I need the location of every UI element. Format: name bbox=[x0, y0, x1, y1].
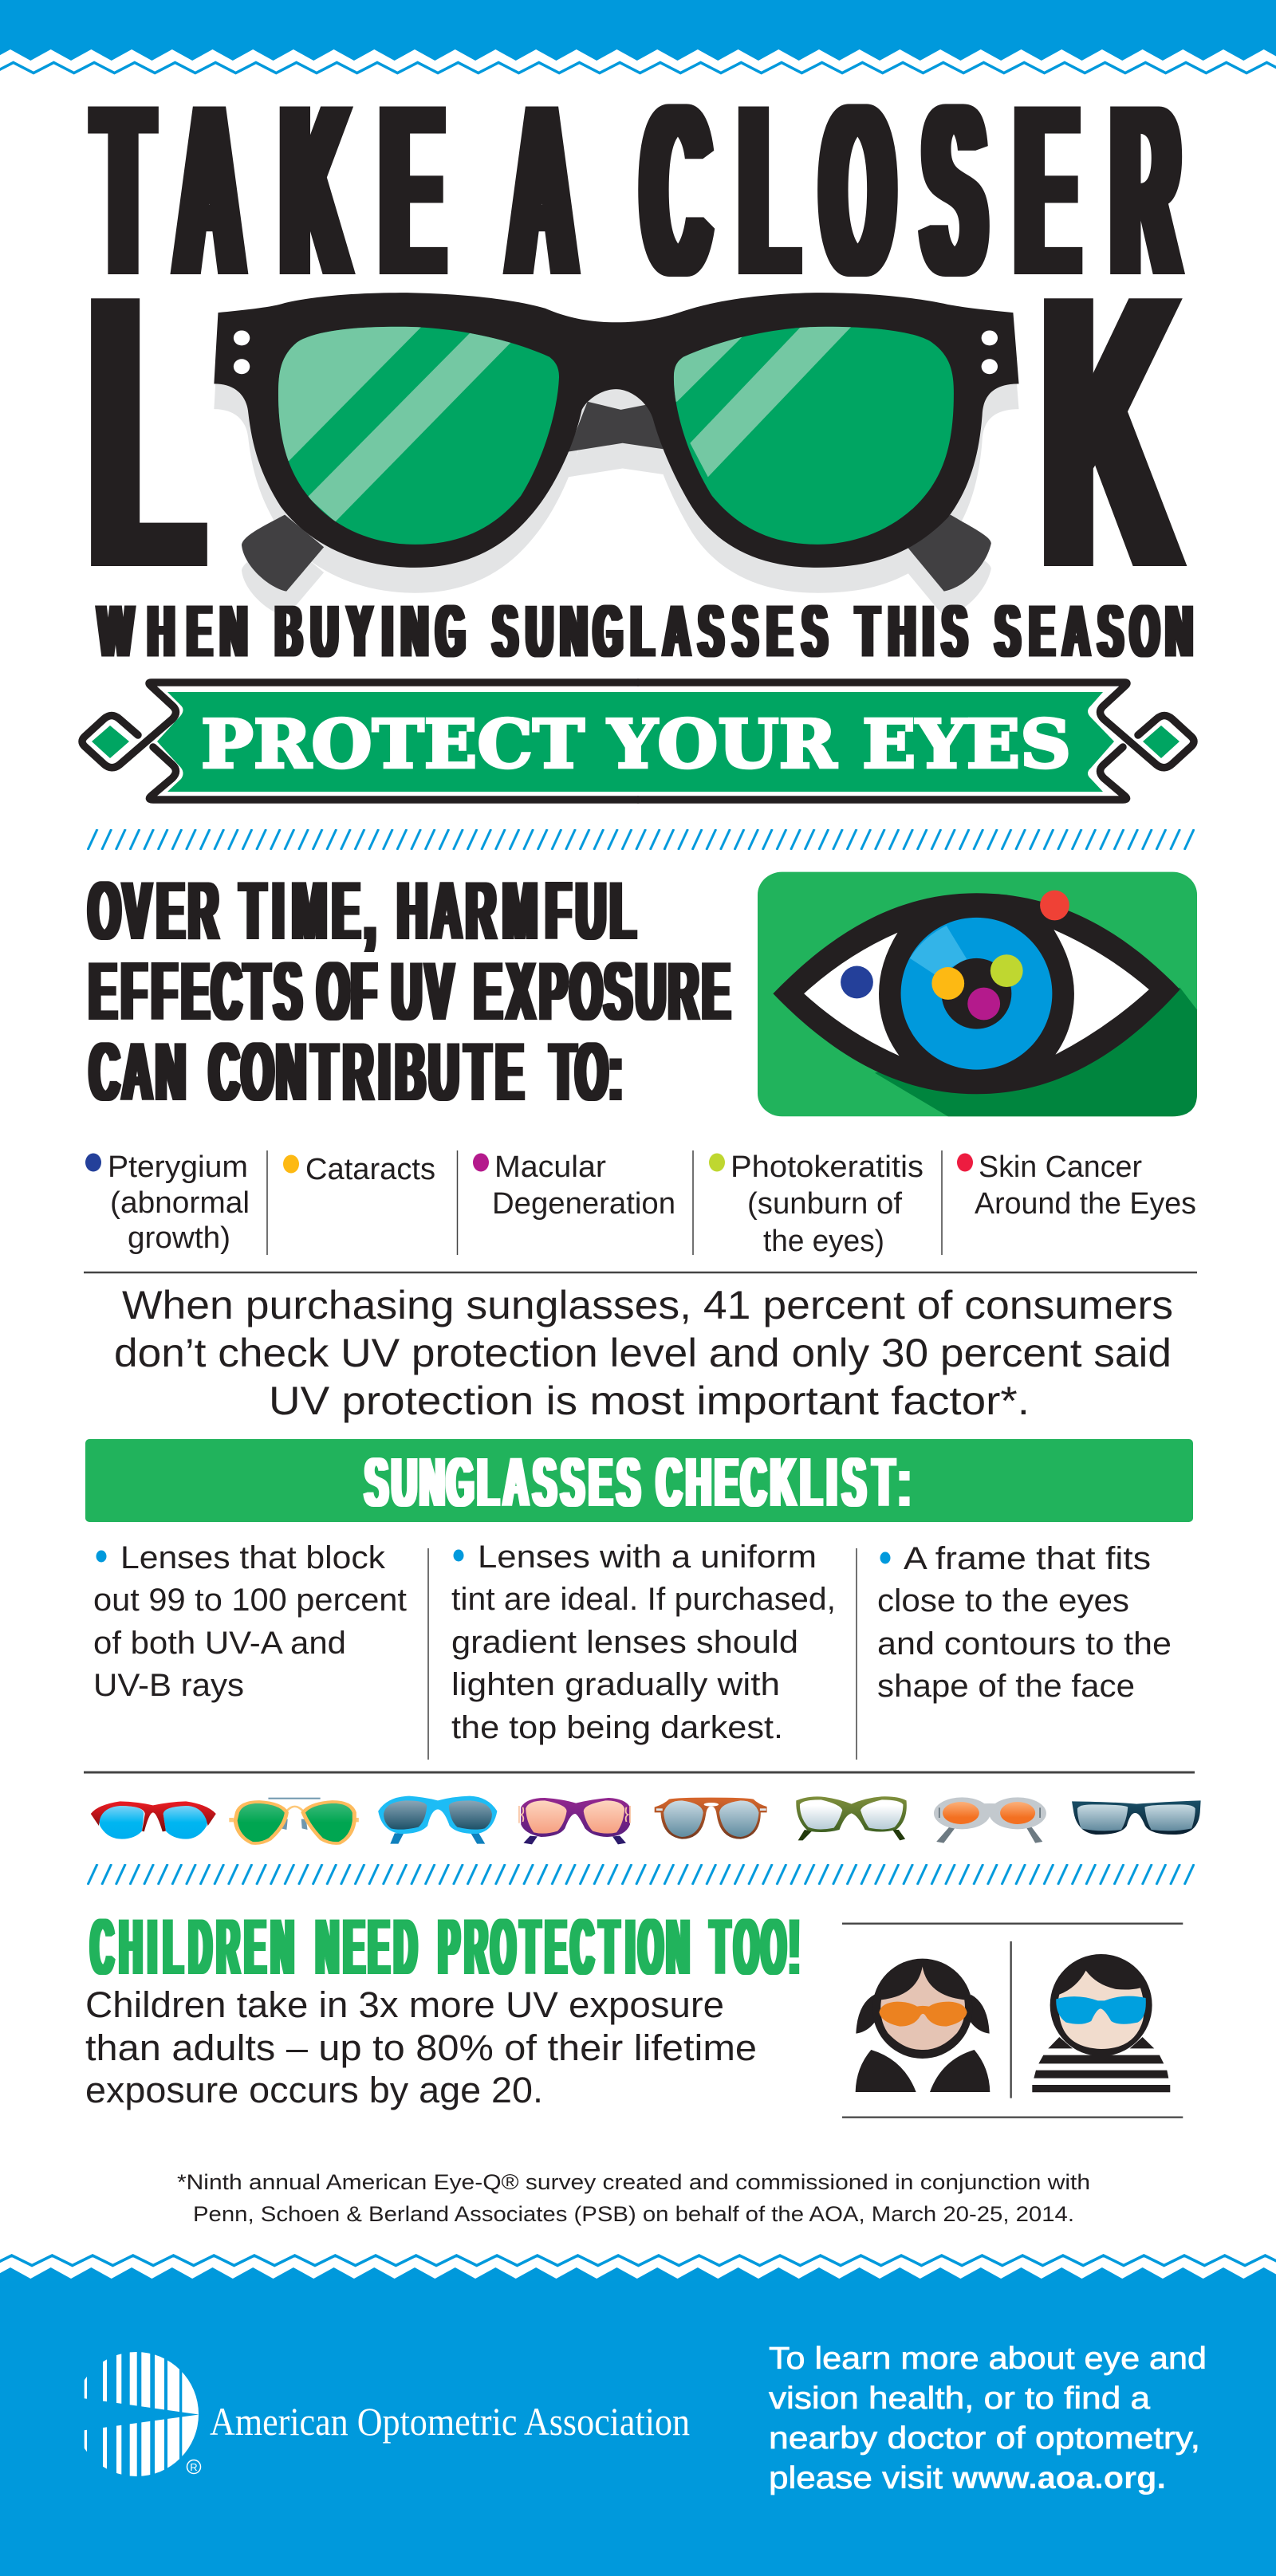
heading bar: sunglasses checklist: SUNGLASSES CHECKLIST: bbox=[364, 1444, 910, 1521]
item: cataracts: Cataracts bbox=[305, 1153, 435, 1186]
icon: silver round glasses bbox=[934, 1797, 1046, 1843]
text block: learn more: To learn more about eye and bbox=[769, 2342, 1207, 2376]
icon: blue frame glasses bbox=[378, 1796, 497, 1844]
text block: purchasing statistic: When purchasing sunglasses, 41 percent of consumers bbox=[122, 1283, 1173, 1327]
checklist item: lenses block UV: out 99 to 100 percent bbox=[93, 1583, 407, 1618]
text block: purchasing statistic bbox=[114, 1283, 1173, 1423]
text block: learn more: nearby doctor of optometry, bbox=[769, 2421, 1200, 2456]
heading: over time harmful effects: OVER TIME, HARMFUL bbox=[89, 866, 636, 958]
icon: striped eye circle bbox=[80, 2352, 199, 2476]
text block: learn more: vision health, or to find a bbox=[769, 2381, 1150, 2416]
item: skin cancer around the eyes: Skin Cancer bbox=[979, 1150, 1142, 1184]
logo: American Optometric Association bbox=[80, 2352, 690, 2476]
checklist item: uniform tint: Lenses with a uniform bbox=[478, 1540, 817, 1575]
text block: children exposure: exposure occurs by age 20. bbox=[85, 2070, 543, 2110]
item: macular degeneration: Degeneration bbox=[492, 1187, 675, 1221]
checklist item: lenses block UV: Lenses that block bbox=[120, 1540, 386, 1575]
heading bar: sunglasses checklist bbox=[85, 1439, 1193, 1522]
item: pterygium: (abnormal bbox=[110, 1186, 250, 1220]
item: pterygium: growth) bbox=[128, 1221, 230, 1255]
item: skin cancer around the eyes bbox=[957, 1150, 1196, 1221]
text block: children exposure bbox=[85, 1984, 757, 2110]
text block: children exposure: Children take in 3x more UV exposure bbox=[85, 1984, 724, 2025]
icon: boy with striped shirt and blue sunglasses bbox=[1032, 1954, 1170, 2092]
subtitle: WHEN BUYING SUNGLASSES THIS SEASON bbox=[98, 589, 1192, 673]
text block: purchasing statistic: don’t check UV protection level and only 30 percent said bbox=[114, 1331, 1172, 1375]
icon: green aviators bbox=[229, 1798, 359, 1843]
icon: registered mark bbox=[187, 2460, 201, 2473]
footnote: *Ninth annual American Eye-Q® survey created and commissioned in conjunction with bbox=[177, 2170, 1090, 2194]
item: skin cancer around the eyes: Around the Eyes bbox=[975, 1187, 1196, 1221]
checklist item: lenses block UV bbox=[93, 1540, 407, 1703]
text block: learn more bbox=[769, 2342, 1207, 2495]
checklist item: lenses block UV: UV-B rays bbox=[93, 1668, 244, 1703]
item: macular degeneration bbox=[473, 1150, 675, 1221]
icons: row of sunglasses styles, part two bbox=[655, 1796, 1201, 1843]
item: photokeratitis: (sunburn of bbox=[747, 1187, 902, 1221]
footnote bbox=[177, 2170, 1090, 2226]
checklist item: lenses block UV: of both UV-A and bbox=[93, 1626, 346, 1661]
icon: registered mark: R bbox=[190, 2461, 198, 2473]
heading: over time harmful effects bbox=[89, 866, 730, 1119]
banner: protect your eyes: EYES bbox=[862, 705, 1071, 783]
icon: red half-rim glasses bbox=[91, 1801, 216, 1839]
banner: protect your eyes: PROTECT bbox=[201, 705, 585, 783]
checklist item: frame fit: and contours to the bbox=[877, 1626, 1172, 1662]
icon: girl with pigtails and orange sunglasses bbox=[856, 1959, 990, 2092]
checklist item: frame fit: close to the eyes bbox=[877, 1583, 1129, 1618]
item: photokeratitis: Photokeratitis bbox=[731, 1150, 924, 1184]
list: eye conditions bbox=[85, 1150, 1196, 1258]
text block: purchasing statistic: UV protection is most important factor*. bbox=[269, 1378, 1030, 1423]
banner: protect your eyes bbox=[82, 682, 1194, 800]
item: pterygium: Pterygium bbox=[108, 1150, 248, 1184]
footnote: Penn, Schoen & Berland Associates (PSB) on behalf of the AOA, March 20-25, 2014. bbox=[193, 2202, 1074, 2226]
title: letter K of look: K bbox=[1042, 214, 1178, 650]
logo: American Optometric Association: American Optometric Association bbox=[210, 2399, 690, 2444]
icon: navy square glasses bbox=[1072, 1800, 1201, 1835]
text block: learn more: www.aoa.org. bbox=[951, 2461, 1166, 2495]
checklist item: uniform tint: gradient lenses should bbox=[451, 1625, 798, 1660]
heading: over time harmful effects: CAN CONTRIBUTE TO: bbox=[89, 1027, 623, 1119]
footer blue band with zigzag edge bbox=[0, 2255, 1276, 2576]
icon: olive glasses bbox=[796, 1796, 907, 1840]
panel: eye illustration bbox=[758, 872, 1197, 1116]
checklist item: uniform tint bbox=[451, 1540, 836, 1745]
item: pterygium bbox=[85, 1150, 250, 1255]
heading: children need protection too: CHILDREN NEED PROTECTION TOO! bbox=[91, 1903, 800, 1991]
title: take a closer: TAKE A CLOSER bbox=[96, 53, 1178, 326]
checklist item: uniform tint: tint are ideal. If purchased, bbox=[451, 1582, 836, 1617]
checklist item: uniform tint: the top being darkest. bbox=[451, 1710, 783, 1745]
icon: large sunglasses forming the OO of look bbox=[214, 293, 1019, 616]
illustration: two children in sunglasses bbox=[842, 1924, 1183, 2118]
item: photokeratitis bbox=[709, 1150, 924, 1258]
item: macular degeneration: Macular bbox=[494, 1150, 606, 1184]
text block: children exposure: than adults – up to 80% of their lifetime bbox=[85, 2027, 757, 2068]
checklist item: frame fit: shape of the face bbox=[877, 1669, 1135, 1704]
top blue band with zigzag edge bbox=[0, 0, 1276, 73]
checklist item: frame fit: A frame that fits bbox=[904, 1541, 1151, 1576]
icon: purple glasses bbox=[519, 1798, 630, 1844]
icon: orange brown glasses bbox=[655, 1798, 767, 1839]
banner: protect your eyes: YOUR bbox=[607, 705, 837, 783]
heading: over time harmful effects: EFFECTS OF UV EXPOSURE bbox=[89, 946, 730, 1038]
checklist item: uniform tint: lighten gradually with bbox=[451, 1667, 780, 1702]
title: letter L of look: L bbox=[90, 214, 202, 649]
item: photokeratitis: the eyes) bbox=[763, 1225, 884, 1258]
text block: learn more: please visit bbox=[769, 2461, 943, 2495]
icons: row of sunglasses styles, part one bbox=[91, 1796, 630, 1844]
checklist item: frame fit bbox=[877, 1541, 1172, 1704]
